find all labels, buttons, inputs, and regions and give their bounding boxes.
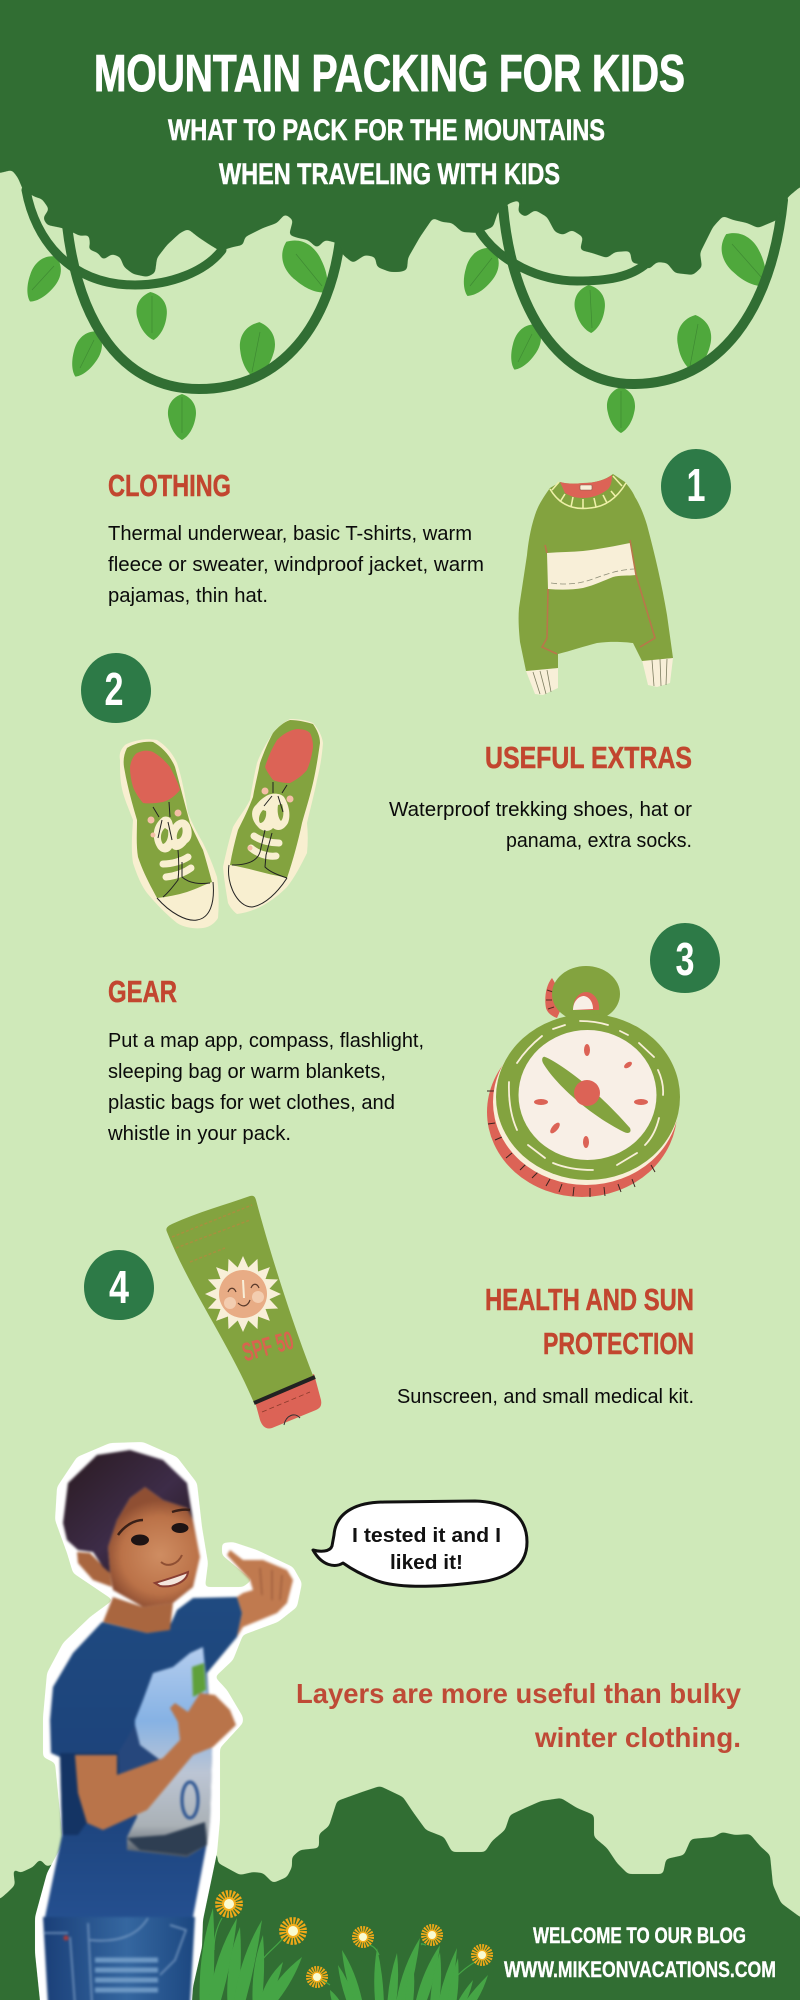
heading: clothing: CLOTHING	[108, 468, 231, 503]
panel: gear	[107, 923, 720, 1197]
callout: layers tip	[296, 1678, 741, 1753]
speech bubble: I tested it and I	[352, 1525, 501, 1547]
speech bubble	[313, 1501, 527, 1586]
number 1	[661, 449, 731, 519]
text: gear list	[107, 1030, 424, 1145]
text: gear list: plastic bags for wet clothes, and	[108, 1092, 395, 1114]
number 2	[81, 653, 151, 723]
number 4: 4	[109, 1261, 129, 1313]
face	[108, 1487, 200, 1607]
number 3: 3	[676, 933, 694, 985]
subtitle: WHAT TO PACK FOR THE MOUNTAINS	[168, 114, 605, 147]
number 4	[84, 1250, 154, 1320]
heading: health and sun protection	[485, 1282, 694, 1361]
jeans	[43, 1917, 195, 2000]
text: clothing list: Thermal underwear, basic T-shirts, warm	[108, 523, 472, 545]
text: gear list: sleeping bag or warm blankets,	[108, 1061, 386, 1083]
face details	[118, 1510, 190, 1586]
arms	[227, 1550, 293, 1637]
number 3	[650, 923, 720, 993]
footer text	[504, 1923, 776, 1982]
left shoe	[120, 739, 219, 928]
text: gear list: whistle in your pack.	[107, 1123, 291, 1145]
grass	[200, 1908, 488, 2000]
number 2: 2	[104, 663, 124, 715]
panel: clothing	[108, 449, 731, 695]
text: useful extras list: Waterproof trekking shoes, hat or	[389, 799, 692, 821]
icon: shoes	[120, 719, 323, 928]
heading: health and sun protection: HEALTH AND SUN	[485, 1282, 694, 1317]
vines and leaves	[18, 190, 783, 440]
neck and ear	[103, 1597, 173, 1633]
subtitle: WHEN TRAVELING WITH KIDS	[219, 158, 560, 191]
canopy header	[0, 0, 800, 277]
bushes footer	[0, 1786, 800, 2000]
icon: compass	[487, 966, 680, 1197]
speech bubble: liked it!	[390, 1552, 463, 1574]
text: useful extras list: panama, extra socks.	[506, 830, 692, 852]
heading: gear: GEAR	[108, 974, 177, 1009]
text: gear list: Put a map app, compass, flashlight,	[108, 1030, 424, 1052]
panel: useful extras	[81, 653, 692, 928]
right shoe	[223, 719, 323, 914]
hair	[63, 1450, 193, 1573]
flowers	[221, 1896, 489, 1984]
subtitle	[168, 114, 605, 191]
icon: sweater	[519, 474, 673, 695]
callout: layers tip: Layers are more useful than bulky	[296, 1678, 741, 1709]
text: clothing list: pajamas, thin hat.	[108, 585, 268, 607]
number 1: 1	[686, 459, 706, 511]
heading: useful extras: USEFUL EXTRAS	[485, 740, 692, 775]
text: clothing list: fleece or sweater, windproof jacket, warm	[108, 554, 484, 576]
t-shirt	[45, 1597, 242, 1917]
text: clothing list	[108, 523, 484, 607]
icon: sunscreen tube: SPF 50	[239, 1325, 297, 1367]
text: useful extras list	[389, 799, 692, 852]
heading: health and sun protection: PROTECTION	[543, 1326, 694, 1361]
callout: layers tip: winter clothing.	[534, 1722, 741, 1753]
photo: boy giving thumbs up	[35, 1442, 302, 2000]
panel: health and sun protection	[84, 1196, 694, 1429]
text: health list: Sunscreen, and small medical kit.	[397, 1386, 694, 1408]
icon: sunscreen tube	[166, 1196, 321, 1429]
